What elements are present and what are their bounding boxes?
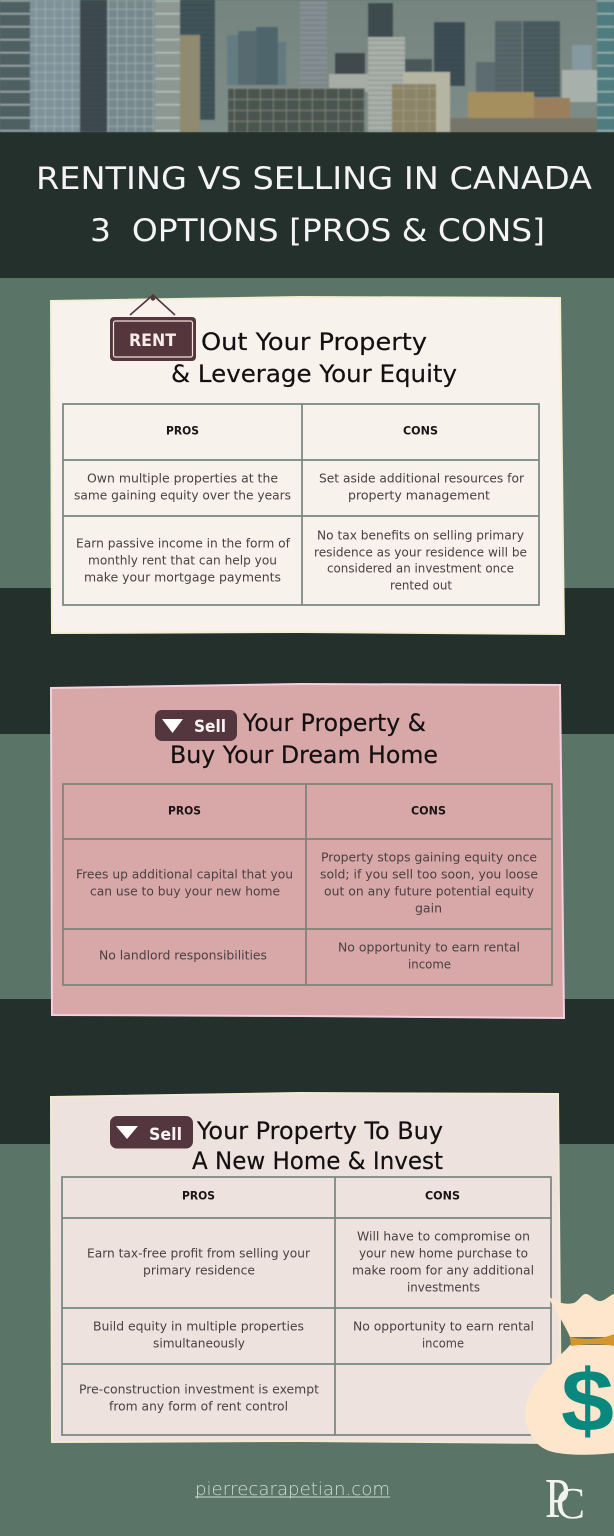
heading: sell and invest: A New Home & Invest bbox=[192, 1147, 443, 1175]
icon: money bag bbox=[525, 1294, 614, 1455]
table: rent pros and cons: considered an investment once bbox=[327, 562, 514, 576]
title: 3 OPTIONS [PROS & CONS] bbox=[90, 213, 545, 249]
table: sell dream home pros and cons: gain bbox=[415, 902, 442, 916]
badge: sell bbox=[155, 710, 237, 741]
table: sell and invest pros and cons: Earn tax-free profit from selling your bbox=[87, 1246, 310, 1260]
badge: sell bbox=[110, 1116, 193, 1148]
table: sell and invest pros and cons: make room for any additional bbox=[352, 1264, 534, 1278]
table: sell dream home pros and cons: out on any future potential equity bbox=[324, 884, 534, 898]
title: RENTING VS SELLING IN CANADA bbox=[36, 161, 592, 197]
table: sell dream home pros and cons: No landlord responsibilities bbox=[99, 948, 267, 962]
badge: sell: Sell bbox=[149, 1125, 182, 1145]
table: rent pros and cons: same gaining equity over the years bbox=[74, 488, 291, 502]
table: sell dream home pros and cons: Property stops gaining equity once bbox=[321, 850, 537, 864]
table: sell and invest pros and cons bbox=[62, 1177, 551, 1435]
table: rent pros and cons: Own multiple properties at the bbox=[87, 472, 278, 486]
table: sell and invest pros and cons: investments bbox=[407, 1280, 480, 1294]
table: sell dream home pros and cons: sold; if you sell too soon, you loose bbox=[320, 868, 538, 882]
heading: rent: Out Your Property bbox=[201, 328, 427, 356]
table: sell dream home pros and cons: Frees up additional capital that you bbox=[76, 868, 293, 882]
table: rent pros and cons: property management bbox=[348, 488, 490, 502]
icon: money bag: $ bbox=[561, 1351, 614, 1450]
title bbox=[36, 161, 592, 249]
table: rent pros and cons: Set aside additional resources for bbox=[319, 472, 524, 486]
table: sell dream home pros and cons: income bbox=[408, 958, 451, 972]
table: sell and invest pros and cons: Pre-construction investment is exempt bbox=[79, 1382, 319, 1396]
logo: PC monogram: C bbox=[556, 1479, 585, 1528]
table: rent pros and cons: No tax benefits on selling primary bbox=[317, 528, 524, 542]
heading: sell dream home bbox=[170, 709, 438, 769]
table: sell dream home pros and cons bbox=[63, 784, 552, 985]
table: rent pros and cons: residence as your residence will be bbox=[314, 546, 527, 560]
panel: sell and buy dream home bbox=[51, 684, 564, 1018]
icon: hanging rent sign: RENT bbox=[129, 331, 176, 351]
table: sell and invest pros and cons: Build equity in multiple properties bbox=[93, 1320, 304, 1334]
table: sell and invest pros and cons: Will have to compromise on bbox=[357, 1230, 530, 1244]
table: sell and invest pros and cons: your new home purchase to bbox=[359, 1246, 528, 1260]
table: sell and invest pros and cons: from any form of rent control bbox=[109, 1400, 288, 1414]
table: rent pros and cons: CONS bbox=[403, 424, 438, 438]
table: sell and invest pros and cons: primary residence bbox=[143, 1264, 255, 1278]
logo: PC monogram: P bbox=[545, 1468, 570, 1530]
header photo: city skyline bbox=[0, 0, 614, 132]
heading: sell and invest: Your Property To Buy bbox=[196, 1117, 443, 1145]
table: rent pros and cons: make your mortgage payments bbox=[84, 570, 281, 584]
badge: sell: Sell bbox=[194, 717, 226, 737]
table: rent pros and cons: PROS bbox=[166, 424, 199, 438]
table: sell and invest pros and cons: simultaneously bbox=[153, 1336, 245, 1350]
panel: sell to buy and invest bbox=[51, 1093, 561, 1443]
table: rent pros and cons: rented out bbox=[390, 578, 452, 592]
table: sell and invest pros and cons: income bbox=[422, 1336, 464, 1350]
table: sell dream home pros and cons: No opportunity to earn rental bbox=[338, 940, 520, 954]
heading: sell dream home: Buy Your Dream Home bbox=[170, 741, 438, 769]
table: sell and invest pros and cons: No opportunity to earn rental bbox=[353, 1320, 534, 1334]
icon: hanging rent sign bbox=[110, 295, 196, 361]
panel: rent out your property bbox=[51, 295, 564, 634]
heading: rent bbox=[171, 328, 457, 388]
table: sell and invest pros and cons: PROS bbox=[182, 1188, 215, 1202]
table: rent pros and cons bbox=[63, 404, 539, 605]
heading: rent: & Leverage Your Equity bbox=[171, 360, 457, 388]
table: sell dream home pros and cons: PROS bbox=[168, 804, 201, 818]
table: sell and invest pros and cons: CONS bbox=[425, 1188, 460, 1202]
table: sell dream home pros and cons: CONS bbox=[411, 804, 446, 818]
table: sell dream home pros and cons: can use to buy your new home bbox=[90, 884, 280, 898]
table: rent pros and cons: monthly rent that can help you bbox=[88, 554, 277, 568]
heading: sell and invest bbox=[192, 1117, 443, 1175]
heading: sell dream home: Your Property & bbox=[242, 709, 426, 737]
table: rent pros and cons: Earn passive income in the form of bbox=[76, 536, 291, 550]
website link: pierrecarapetian.com bbox=[195, 1479, 390, 1500]
